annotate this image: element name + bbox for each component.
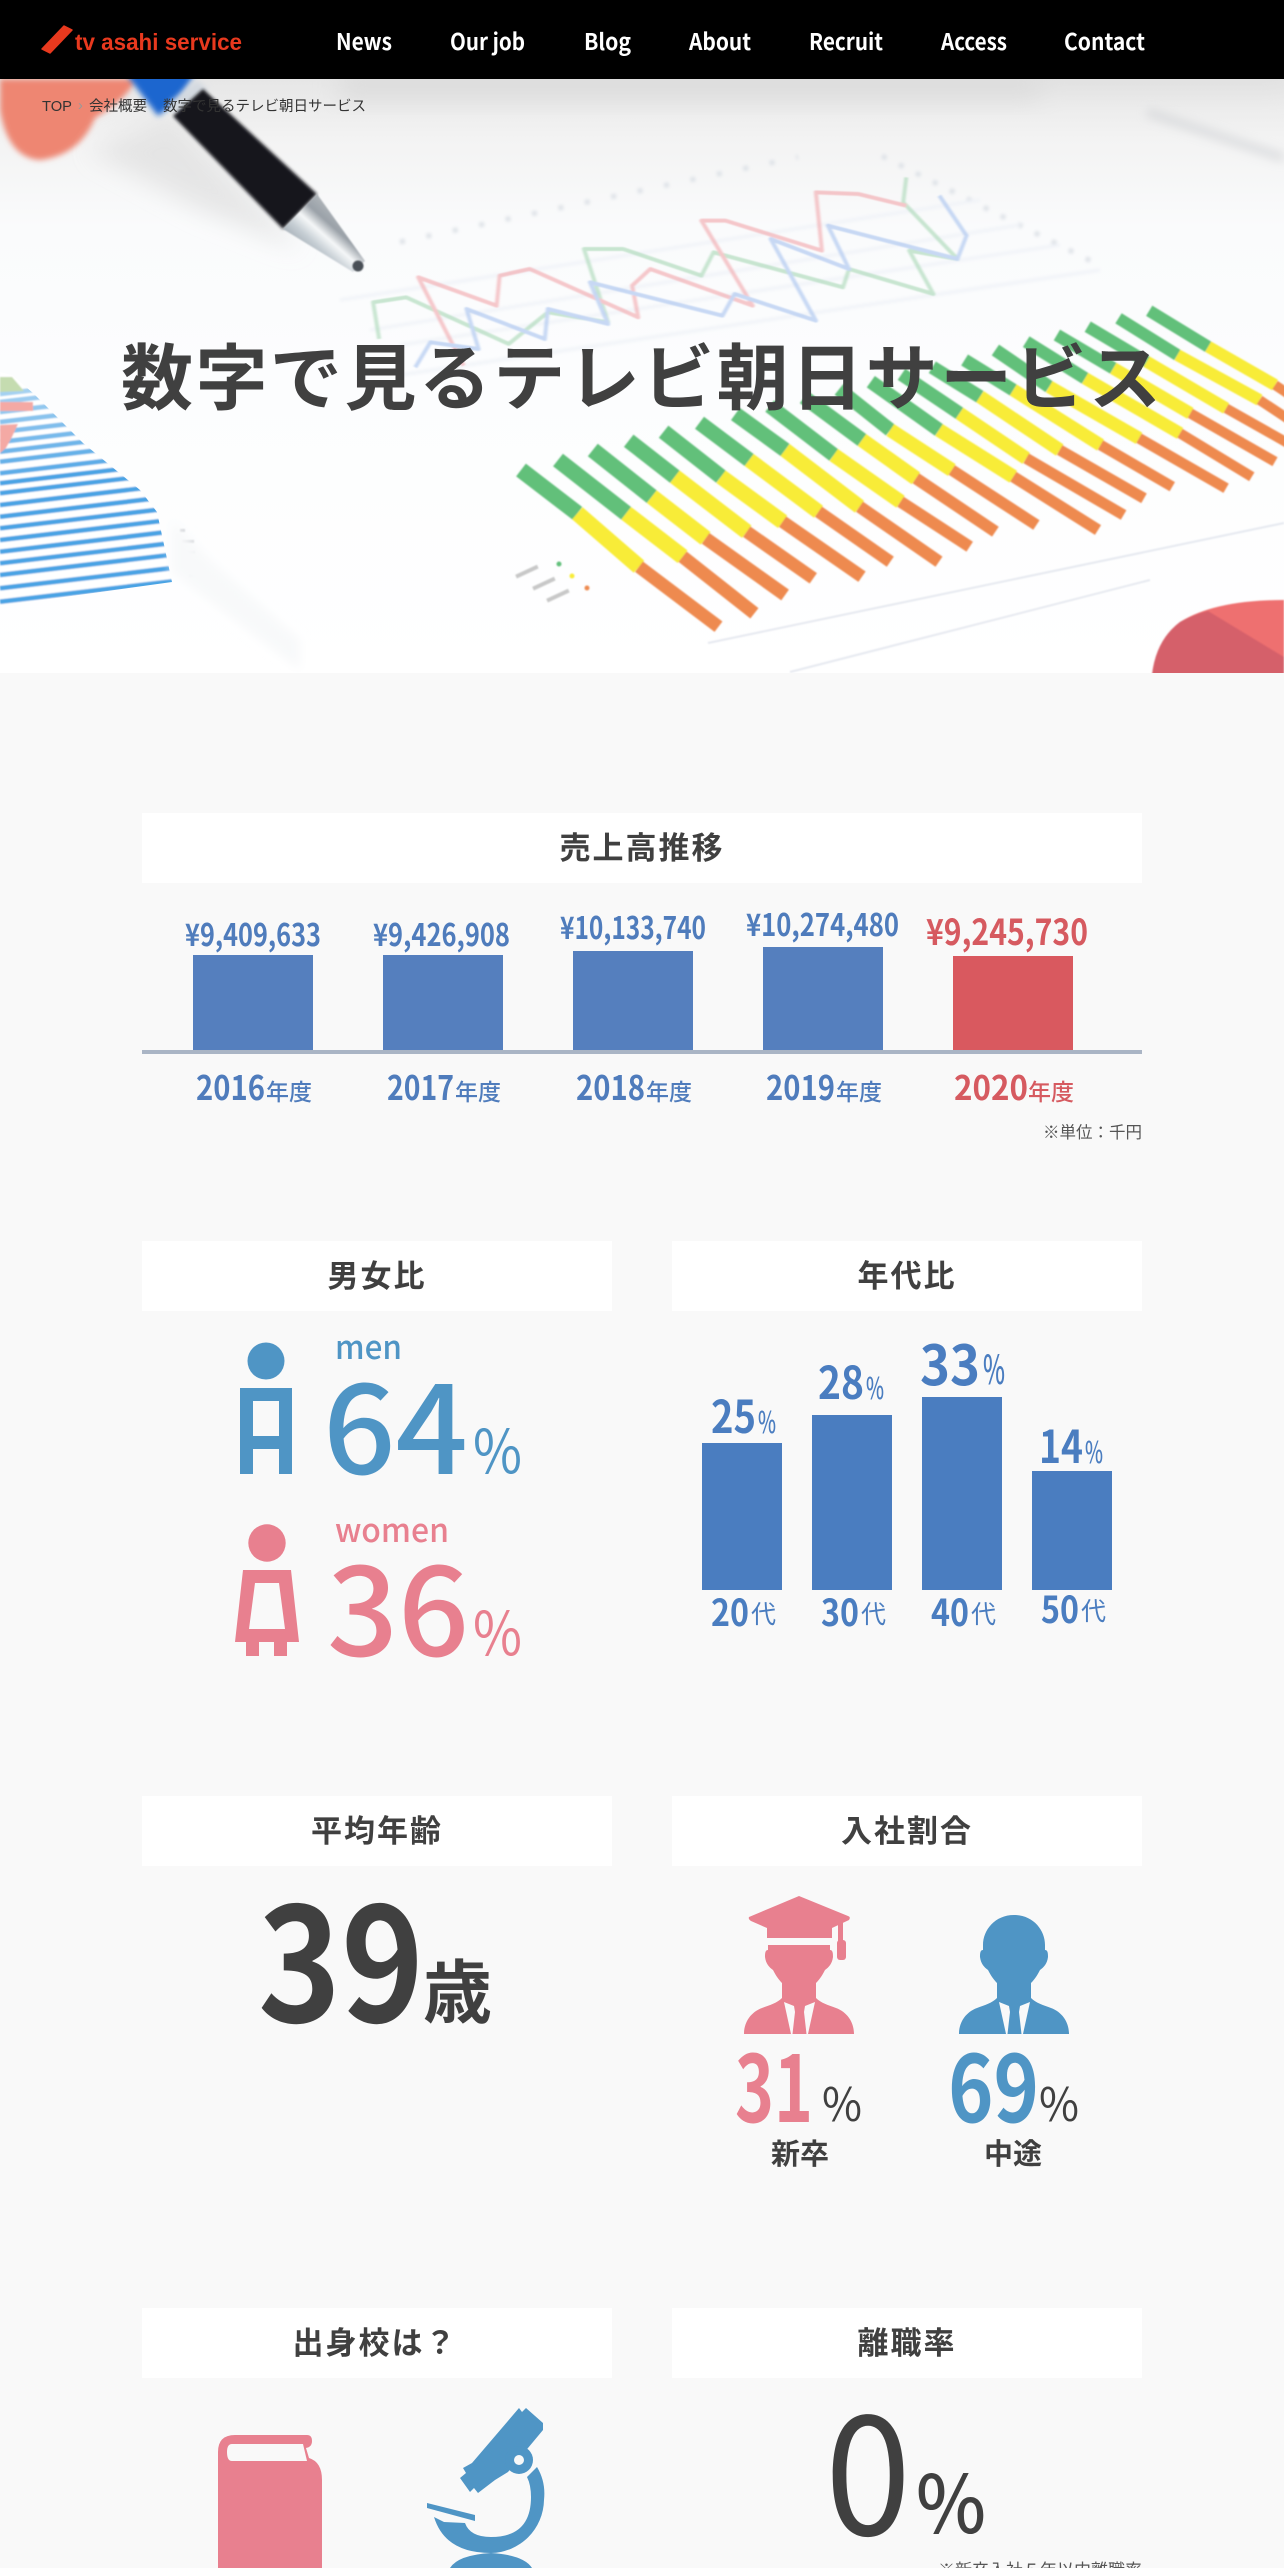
- age labels: 40: [931, 1583, 969, 1637]
- breadcrumb: 会社概要: [89, 98, 147, 115]
- heading: average age: [142, 1796, 612, 1866]
- chart legend marks: [515, 562, 590, 602]
- heading: gender ratio: [142, 1241, 612, 1311]
- women figure: [327, 1504, 522, 1692]
- percentage labels: 14: [1039, 1411, 1083, 1476]
- navigation: Our job: [450, 23, 525, 57]
- striped blue chart at left: [0, 370, 180, 610]
- age labels: [711, 1580, 1106, 1637]
- year labels: 年度: [266, 1073, 312, 1107]
- year labels: 2018: [576, 1061, 645, 1110]
- age labels: 50: [1041, 1580, 1079, 1634]
- value labels: ¥9,426,908: [373, 910, 510, 955]
- hero image: blurred charts and pen photo: [0, 70, 1284, 675]
- navigation: Access: [940, 23, 1007, 57]
- panel: turnover rate: [672, 2308, 1142, 2568]
- year labels: 2019: [766, 1061, 835, 1110]
- men figure: [323, 1321, 522, 1510]
- women figure: women: [335, 1504, 449, 1552]
- panel: hiring ratio: [672, 1796, 1142, 2173]
- pen: [123, 70, 365, 272]
- icon: man: [240, 1342, 292, 1474]
- navigation: Contact: [1064, 23, 1145, 57]
- panel: alma mater: [142, 2308, 612, 2568]
- heading: turnover rate: [672, 2308, 1142, 2378]
- mid-career figure: %: [1039, 2069, 1079, 2135]
- breadcrumb: TOP: [42, 99, 72, 115]
- year labels: 年度: [455, 1073, 501, 1107]
- heading: sales trend: 売上高推移: [560, 823, 724, 868]
- new graduate figure: %: [822, 2069, 862, 2135]
- header bar: [0, 0, 1284, 79]
- heading: hiring ratio: [672, 1796, 1142, 1866]
- value labels: ¥10,274,480: [746, 900, 899, 945]
- line chart: [373, 177, 966, 367]
- heading: alma mater: 出身校は？: [292, 2318, 458, 2363]
- panel: gender ratio: [142, 1241, 612, 1692]
- women figure: 36: [327, 1515, 469, 1692]
- age labels: 30: [821, 1583, 859, 1637]
- panel: average age: [142, 1796, 612, 2068]
- icon: graduate: [744, 1896, 854, 2034]
- icon: book: [218, 2435, 322, 2568]
- breadcrumb: 数字で見るテレビ朝日サービス: [163, 98, 366, 115]
- age labels: 20: [711, 1583, 749, 1637]
- small chart labels: [180, 528, 194, 543]
- unit note: ※単位：千円: [1043, 1119, 1142, 1143]
- heading: turnover rate: 離職率: [858, 2318, 956, 2363]
- logo mark: [42, 26, 72, 53]
- value labels: ¥9,409,633: [185, 910, 321, 955]
- bar chart: age groups: [702, 1321, 1112, 1637]
- new graduate figure: 新卒: [771, 2131, 829, 2173]
- age labels: 代: [861, 1595, 886, 1631]
- men figure: men: [335, 1321, 402, 1369]
- percentage labels: 28: [818, 1347, 864, 1412]
- heading: sales trend: [142, 813, 1142, 883]
- red pie chart: [1152, 600, 1284, 675]
- navigation: News: [336, 23, 392, 57]
- paper edge lines: [708, 523, 1284, 672]
- age labels: 代: [971, 1595, 996, 1631]
- heading: age ratio: [672, 1241, 1142, 1311]
- breadcrumb: [42, 98, 366, 115]
- value labels: ¥9,245,730: [926, 904, 1088, 956]
- icon: woman: [235, 1524, 299, 1656]
- logo text: tv asahi service: [75, 29, 242, 55]
- age labels: 代: [751, 1595, 776, 1631]
- navigation: [336, 23, 1145, 57]
- women figure: %: [473, 1586, 522, 1673]
- dotted data rows of the line chart: [399, 154, 1091, 262]
- percentage labels: [711, 1321, 1103, 1476]
- navigation: About: [688, 23, 751, 57]
- year labels: 年度: [1028, 1073, 1074, 1107]
- year labels: 2016: [196, 1061, 265, 1110]
- new graduate figure: 31: [735, 2016, 813, 2149]
- heading: average age: 平均年齢: [311, 1806, 443, 1851]
- pen shadow: [109, 125, 282, 240]
- mid-career figure: 中途: [984, 2131, 1042, 2173]
- year labels: 年度: [646, 1073, 692, 1107]
- turnover number: [825, 2347, 986, 2568]
- icon: microscope: [427, 2408, 544, 2568]
- stacked bar chart: [521, 311, 1284, 627]
- men figure: 64: [323, 1333, 468, 1510]
- navigation: Recruit: [809, 23, 883, 57]
- out-of-focus background: [353, 80, 1032, 96]
- bar chart: sales by year: [142, 900, 1142, 1110]
- percentage labels: %: [1085, 1428, 1103, 1472]
- breadcrumb: ›: [78, 98, 83, 114]
- men figure: %: [473, 1404, 522, 1491]
- heading: hiring ratio: 入社割合: [841, 1806, 973, 1851]
- icon: mid-career businessperson: [959, 1915, 1069, 2034]
- percentage labels: %: [758, 1398, 776, 1442]
- year labels: 2017: [387, 1061, 454, 1110]
- heading: alma mater: [142, 2308, 612, 2378]
- value labels: [185, 900, 1088, 956]
- year labels: 年度: [836, 1073, 882, 1107]
- percentage labels: 33: [920, 1321, 980, 1401]
- average age number: 歳: [423, 1937, 492, 2037]
- heading: gender ratio: 男女比: [328, 1251, 426, 1296]
- year labels: [196, 1061, 1074, 1110]
- turnover number: %: [916, 2441, 986, 2557]
- panel: age ratio: [672, 1241, 1142, 1637]
- average age number: 39: [258, 1839, 424, 2068]
- percentage labels: %: [983, 1338, 1005, 1396]
- navigation: Blog: [584, 23, 631, 57]
- percentage labels: 25: [711, 1381, 756, 1446]
- heading: age ratio: 年代比: [858, 1251, 956, 1296]
- year labels: 2020: [954, 1061, 1028, 1110]
- mid-career figure: 69: [948, 2016, 1039, 2149]
- hand: [0, 79, 136, 160]
- hero title: 数字で見るテレビ朝日サービス: [121, 320, 1163, 425]
- value labels: ¥10,133,740: [560, 903, 706, 948]
- panel: sales trend: [142, 813, 1142, 1143]
- age labels: 代: [1081, 1592, 1106, 1628]
- percentage labels: %: [866, 1364, 884, 1408]
